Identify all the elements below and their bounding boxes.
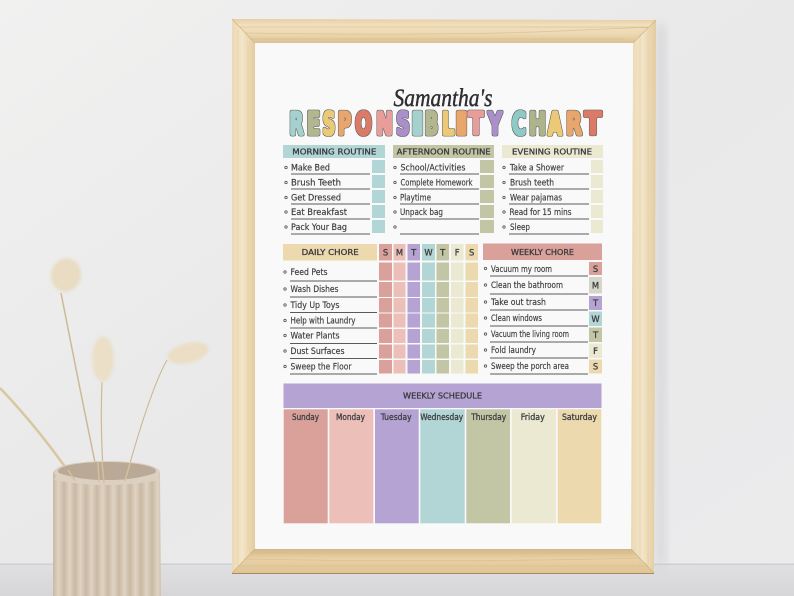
checklist: daily chores: Tidy Up Toys [290,301,340,311]
checklist: daily chores: Water Plants [290,332,340,342]
decoration: dried bunny-tail grass [0,255,211,483]
weekday tracker grid: S [383,248,388,258]
title: Responsiblity Chart: P [338,106,351,142]
title: Responsiblity Chart: H [529,106,546,142]
title: Responsiblity Chart: I [454,106,468,142]
checklist: daily chores: Feed Pets [290,268,328,278]
title: Responsiblity Chart: R [566,106,582,142]
checklist: morning items: Make Bed [291,164,330,174]
column: Tuesday: Tuesday [380,412,412,422]
checklist: weekly chores: W [591,314,600,324]
panel: evening routine [502,145,603,234]
panel: daily chore [283,244,478,374]
panel: afternoon routine [393,145,494,234]
checklist: evening items: Wear pajamas [510,194,562,204]
column: Friday: Friday [521,412,545,422]
title: Responsiblity Chart: T [468,106,484,142]
checklist: weekly chores: Take out trash [490,298,546,308]
column: Wednesday: Wednesday [420,412,463,422]
column: Wednesday [420,409,465,523]
decoration: ribbed ceramic vase [53,461,161,596]
column: Sunday [284,409,328,523]
checklist: weekly chores: T [592,298,599,308]
checklist: morning items: Brush Teeth [291,178,341,188]
column: Sunday: Sunday [292,412,319,422]
title: Responsiblity Chart: C [512,106,526,142]
panel: weekly chore [483,244,602,374]
heading: weekly schedule [284,384,602,408]
checklist: morning items: Get Dressed [291,194,341,204]
poster content [283,85,603,523]
checklist: weekly chores: Clean the bathroom [491,281,563,291]
title: Responsiblity Chart: N [376,106,393,142]
checklist: weekly chores: Clean windows [491,314,542,324]
heading: afternoon routine: AFTERNOON ROUTINE [397,148,491,156]
checklist: afternoon items: Complete Homework [400,178,473,188]
checklist: weekly chores: T [592,330,599,340]
column: Friday [512,409,556,523]
checklist: afternoon items: School/Activities [400,164,466,174]
title: Responsiblity Chart: T [584,106,602,142]
checklist: weekly chores: S [593,264,598,274]
weekday tracker grid [379,244,478,374]
checklist: daily chores: Sweep the Floor [290,362,352,372]
checklist: afternoon items: Unpack bag [400,208,443,218]
checklist: afternoon items [394,160,494,234]
heading: evening routine: EVENING ROUTINE [512,148,592,156]
title: Responsiblity Chart: I [410,106,424,142]
title: Responsiblity Chart: O [355,106,372,142]
checklist: weekly chores: M [592,280,599,290]
column: Saturday: Saturday [562,412,597,422]
weekday tracker grid: T [439,248,446,258]
checklist: weekly chores: Fold laundry [491,346,536,356]
weekday tracker grid: S [469,248,474,258]
checklist: weekly chores: Sweep the porch area [491,362,569,372]
title: Responsiblity Chart [290,106,602,142]
column: Thursday: Thursday [470,412,506,422]
title: Responsiblity Chart: R [290,106,304,142]
column: Thursday [466,409,510,523]
checklist: evening items [503,160,603,234]
weekday tracker grid: W [424,248,433,258]
title: Responsiblity Chart: A [548,106,562,142]
title: Responsiblity Chart: L [442,106,454,142]
title: Responsiblity Chart: E [307,106,320,142]
checklist: evening items: Brush teeth [510,178,554,188]
title: Responsiblity Chart: B [425,106,438,142]
checklist: weekly chores [484,262,602,374]
checklist: weekly chores: F [593,346,598,356]
title: Responsiblity Chart: S [323,106,335,142]
title: Responsiblity Chart: Y [487,106,502,142]
checklist: evening items: Take a Shower [509,164,564,174]
heading: weekly schedule: WEEKLY SCHEDULE [403,392,482,400]
heading: morning routine: MORNING ROUTINE [292,148,376,156]
checklist: weekly chores: Vacuum my room [491,265,552,275]
checklist: daily chores: Help with Laundry [290,316,356,326]
checklist: morning items: Eat Breakfast [291,208,348,218]
heading: weekly chore: WEEKLY CHORE [511,248,574,257]
panel: weekly schedule [284,384,602,523]
checklist: evening items: Sleep [510,223,530,233]
title: Samantha's: Samantha's [394,85,492,112]
checklist: morning items [285,160,385,234]
checklist: weekly chores: Vacuum the living room [491,330,569,340]
checklist: morning items: Pack Your Bag [291,223,347,233]
checklist: afternoon items: Playtime [400,194,431,204]
panel: morning routine [283,145,385,234]
column: Monday [329,409,373,523]
poster paper [255,43,633,549]
weekday tracker grid: M [396,248,403,258]
column: Monday: Monday [336,412,365,422]
weekday tracker grid: F [455,248,460,258]
heading: daily chore: DAILY CHORE [302,248,359,257]
checklist: evening items: Read for 15 mins [510,208,572,218]
checklist: daily chores [284,268,377,374]
title: Responsiblity Chart: S [396,106,410,142]
heading: daily chore [283,244,377,260]
wooden picture frame [232,19,656,574]
checklist: daily chores: Dust Surfaces [290,347,345,357]
checklist: weekly chores: S [593,362,598,372]
weekday tracker grid: T [410,248,417,258]
column: Saturday [558,409,601,523]
column: Tuesday [375,409,419,523]
checklist: daily chores: Wash Dishes [290,285,339,295]
